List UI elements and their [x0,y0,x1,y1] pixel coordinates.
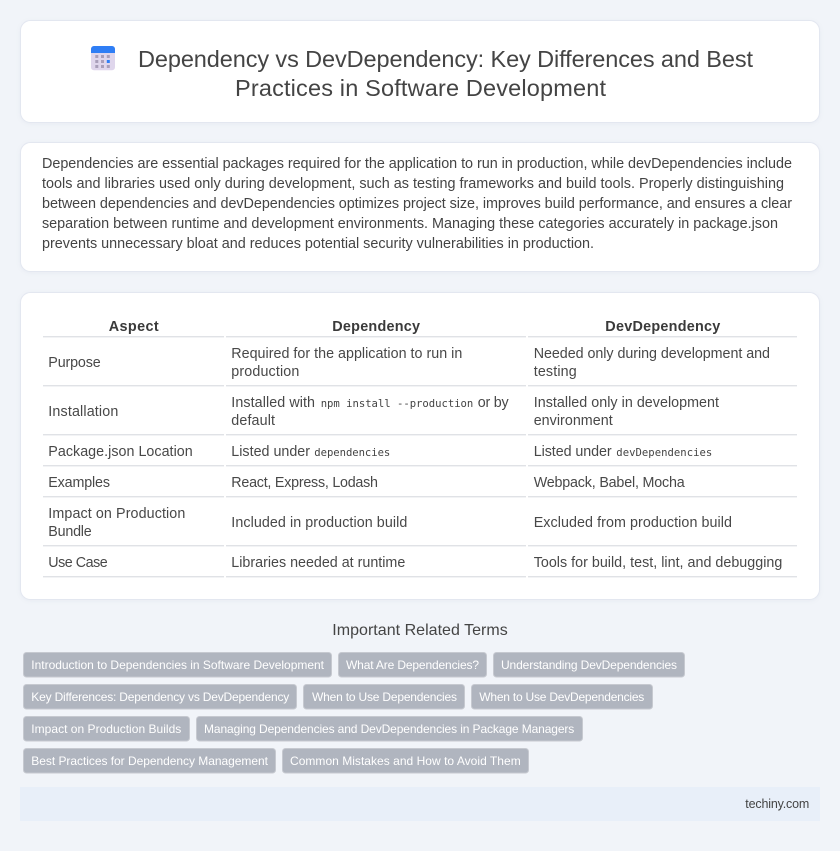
tag: Key Differences: Key Differences: Dependency vs DevDependency [31,690,289,704]
row: Package.json Location: Package.json Location [48,444,193,460]
table headers [109,319,720,335]
table headers: Aspect [109,319,159,335]
related terms tags [24,652,684,773]
title: Dependency vs DevDependency: Key Differences and Best [138,46,753,72]
row: Purpose: production [231,364,299,380]
row: Installation: Installation [48,404,118,420]
row: Package.json Location [48,444,712,460]
tag: When to Use Dependencies: When to Use Dependencies [312,690,457,704]
panel: introduction [20,142,820,272]
tag: Understanding DevDependencies [494,652,684,677]
tag: Introduction [24,652,332,677]
tag: When to Use DevDependencies [472,684,652,709]
intro text [42,156,792,252]
row: Examples [48,475,685,491]
intro text: tools and libraries used only during development, such as testing frameworks and build tools. Properly distinguishing [42,176,784,192]
row: Purpose: Required for the application to run in [231,346,462,362]
header panel [20,20,820,122]
row: Installation: environment [534,413,613,429]
row: Package.json Location: devDependencies [616,447,712,459]
row: Impact on Production Bundle [48,506,732,540]
row: Installation [48,395,719,429]
related terms heading: Important Related Terms [332,622,508,639]
icon: calendar grid [91,46,115,70]
row: Purpose: Needed only during development and [534,346,770,362]
tag: Best Practices [24,748,276,773]
tag: Common Mistakes: Common Mistakes and How to Avoid Them [290,754,521,768]
tag: Understanding DevDependencies: Understanding DevDependencies [501,658,677,672]
panel: comparison table [20,292,820,600]
row: Installation: or by [478,395,510,411]
tag: Common Mistakes [282,748,528,773]
tag: When to Use DevDependencies: When to Use DevDependencies [479,690,644,704]
table headers: Dependency [332,319,420,335]
row: Installation: npm install --production [321,398,473,410]
row: Purpose: testing [534,364,577,380]
intro text: Dependencies are essential packages required for the application to run in production, while devDependencies include [42,156,792,172]
tag: What Are Dependencies: What Are Dependencies? [346,658,479,672]
tag: Managing Dependencies [196,716,582,741]
tag: Impact on Production Builds [24,716,190,741]
tag: Best Practices: Best Practices for Dependency Management [31,754,269,768]
title [138,46,753,101]
tag: Key Differences [24,684,296,709]
tag: Managing Dependencies: Managing Dependencies and DevDependencies in Package Managers [204,722,574,736]
comparison table [43,319,797,577]
row: Examples: React, Express, Lodash [231,475,378,491]
tag: When to Use Dependencies [304,684,464,709]
row: Impact on Production Bundle: Impact on Production [48,506,185,522]
row: Impact on Production Bundle: Included in production build [231,515,407,531]
intro text: between dependencies and devDependencies optimizes project size, improves build performance, and ensures a clear [42,196,792,212]
row: Package.json Location: Listed under [534,444,612,460]
row: Installation: Installed only in development [534,395,719,411]
row: Examples: Examples [48,475,110,491]
tag: Impact on Production Builds: Impact on Production Builds [31,722,181,736]
row: Purpose [48,346,770,380]
footer bar [20,787,820,821]
table headers: DevDependency [605,319,720,335]
row: Package.json Location: dependencies [314,447,390,459]
row: Use Case: Tools for build, test, lint, and debugging [534,555,782,571]
intro text: prevents unnecessary bloat and reduces potential security vulnerabilities in production. [42,236,594,252]
tag: Introduction: Introduction to Dependencies in Software Development [31,658,325,672]
row: Installation: Installed with [231,395,315,411]
intro text: separation between runtime and development environments. Managing these categories accurately in package.json [42,216,778,232]
row: Use Case: Libraries needed at runtime [231,555,405,571]
row: Purpose: Purpose [48,355,101,371]
row: Impact on Production Bundle: Excluded from production build [534,515,732,531]
tag: What Are Dependencies [338,652,486,677]
row: Installation: default [231,413,275,429]
row: Use Case [48,555,782,571]
footer source: techiny.com [745,797,809,811]
row: Use Case: Use Case [48,555,108,571]
row: Package.json Location: Listed under [231,444,310,460]
row: Examples: Webpack, Babel, Mocha [534,475,685,491]
row: Impact on Production Bundle: Bundle [48,524,92,540]
title: Practices in Software Development [235,75,606,101]
